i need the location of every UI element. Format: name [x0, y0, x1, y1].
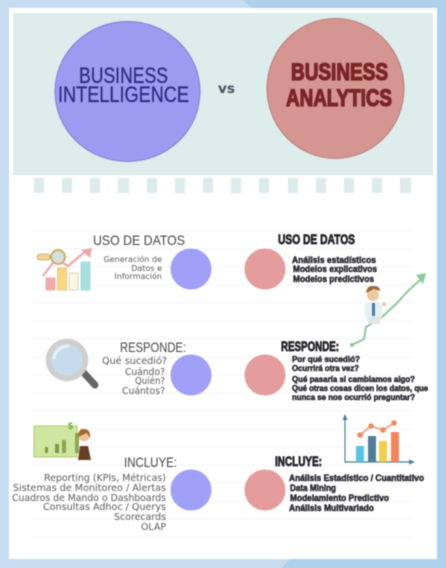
- icon: chart with magnifier: [37, 248, 92, 290]
- title circle: Business Intelligence: INTELLIGENCE: [58, 82, 189, 107]
- heading: responde BA: RESPONDE:: [281, 338, 339, 354]
- title circle: Business Analytics: [267, 18, 404, 158]
- text list: Análisis estadísticos: [292, 255, 376, 265]
- text: questions: Cuántos?: [122, 386, 165, 397]
- text: questions: Quién?: [135, 376, 165, 387]
- text: list: Data Mining: [290, 483, 336, 493]
- text: list: Modelamiento Predictivo: [290, 493, 389, 503]
- circle marker: [244, 248, 286, 290]
- heading: incluye BI: INCLUYE:: [124, 454, 177, 470]
- text: questions: Por qué sucedió?: [292, 355, 360, 364]
- title circle: Business Analytics: ANALYTICS: [286, 85, 392, 112]
- text: generacion: [104, 254, 162, 281]
- text: list: [12, 472, 166, 533]
- text: list: Scorecards: [114, 512, 166, 523]
- text: questions: Qué pasaría si cambiamos algo?: [292, 375, 415, 384]
- vs label: vs: [218, 82, 235, 97]
- icon: presenter with board: $: [68, 421, 73, 431]
- text: questions: [292, 355, 429, 402]
- section 1: right column: [244, 231, 377, 290]
- heading: incluye BA: INCLUYE:: [275, 453, 322, 469]
- text: questions: Cuándo?: [125, 367, 165, 378]
- tabs under header: [34, 178, 411, 193]
- text: generacion: Información: [114, 271, 162, 281]
- icon: presenter with board: [34, 421, 91, 460]
- text: list: Sistemas de Monitoreo / Alertas: [13, 483, 166, 494]
- text: list: [289, 473, 424, 513]
- header band: [13, 13, 433, 193]
- circle marker: [170, 248, 212, 290]
- heading: uso de datos BI: USO DE DATOS: [93, 232, 185, 248]
- section 3: left column: [12, 421, 212, 533]
- section 1: left column: [93, 232, 212, 290]
- icon: bar and line chart: [342, 414, 415, 464]
- title circle: Business Intelligence: [55, 22, 200, 162]
- circle marker: [170, 470, 212, 510]
- circle marker: [170, 354, 212, 396]
- text: questions: Qué sucedió?: [102, 356, 167, 367]
- heading: responde BI: RESPONDE:: [120, 339, 186, 355]
- text: questions: Qué otras cosas dicen los datos, que: [292, 384, 429, 393]
- icon: magnifying glass: [48, 342, 95, 385]
- section 3: right column: [244, 453, 424, 513]
- text: list: Reporting (KPIs, Métricas): [44, 472, 166, 484]
- title circle: Business Intelligence: BUSINESS: [79, 63, 168, 88]
- text list: Modelos predictivos: [293, 274, 374, 284]
- text: list: Análisis Estadístico / Cuantitativo: [289, 473, 424, 483]
- circle marker: [244, 470, 286, 510]
- section 2: right column: [244, 338, 429, 402]
- heading: uso de datos BA: USO DE DATOS: [278, 231, 355, 247]
- text list: Modelos explicativos: [293, 264, 377, 274]
- text: generacion: Generación de: [104, 254, 162, 264]
- text: list: Cuadros de Mando o Dashboards: [12, 493, 166, 504]
- text list: [292, 255, 377, 284]
- section 2: left column: [48, 339, 212, 397]
- circle marker: [244, 354, 286, 396]
- text: questions: nunca se nos ocurrió preguntar?: [292, 393, 415, 402]
- text: list: Análisis Multivariado: [289, 503, 374, 513]
- text: list: OLAP: [141, 522, 166, 533]
- icon: man climbing growth arrow: [350, 273, 426, 347]
- text: generacion: Datos e: [131, 264, 162, 273]
- text: questions: Ocurrirá otra vez?: [292, 364, 359, 373]
- text: questions: [102, 356, 167, 397]
- title circle: Business Analytics: BUSINESS: [291, 59, 388, 86]
- text: list: Consultas Adhoc / Querys: [43, 502, 166, 513]
- ruled note lines: [32, 231, 412, 537]
